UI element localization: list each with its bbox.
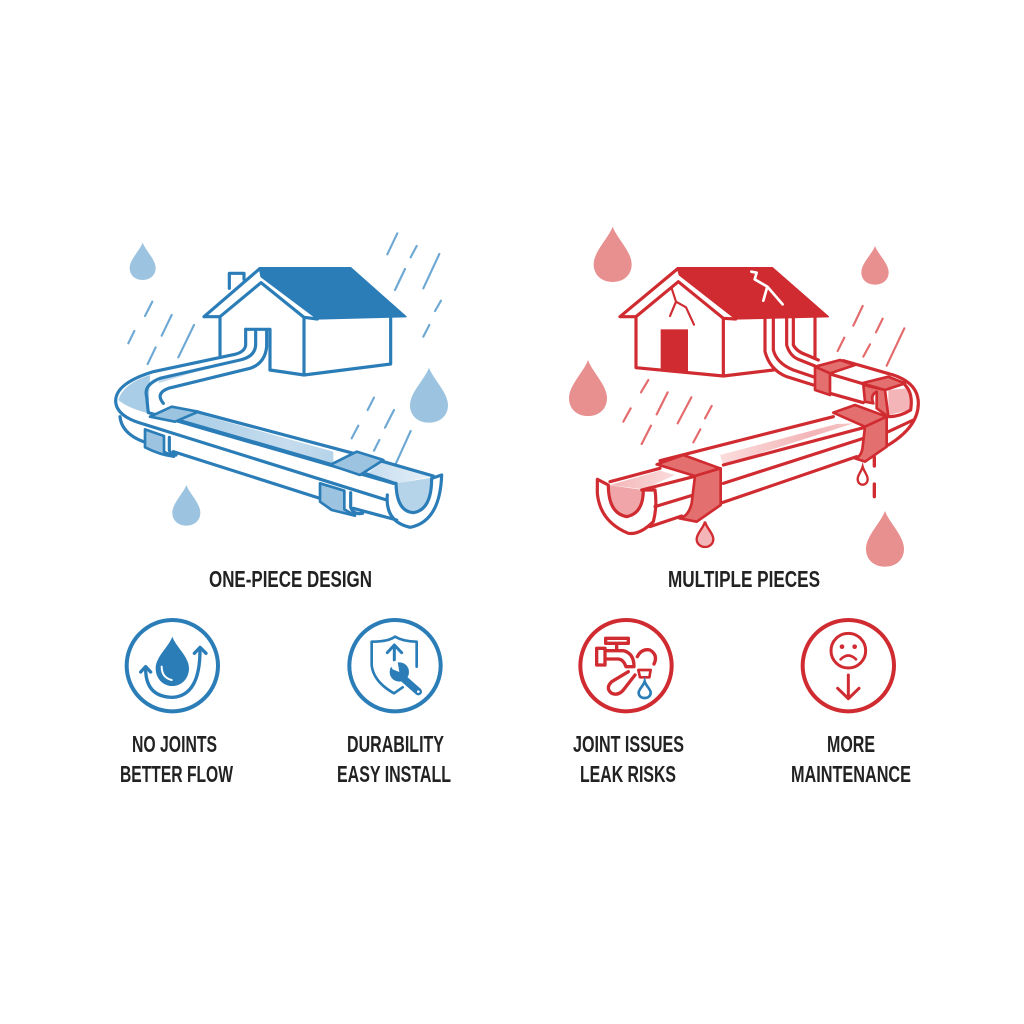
label: durability, easy install xyxy=(337,731,451,787)
house, red, with cracks xyxy=(620,268,828,376)
water drops, blue xyxy=(130,243,448,526)
icon: sad face with down arrow xyxy=(803,620,894,711)
pipe strap, left xyxy=(150,407,198,422)
label: joint issues, leak risks: JOINT ISSUES xyxy=(573,731,684,757)
strap, bend xyxy=(862,377,905,390)
label: more maintenance: MORE xyxy=(827,731,875,757)
multi-piece gutter, red xyxy=(597,318,918,547)
leak drips xyxy=(697,522,713,547)
icon: shield with wrench xyxy=(349,620,441,711)
panel: multiple pieces illustration xyxy=(569,227,918,567)
label: no joints, better flow: NO JOINTS xyxy=(132,731,217,757)
pipe strap, right xyxy=(330,452,383,475)
door xyxy=(661,329,688,371)
icon: water drop with flow arrows xyxy=(127,620,218,711)
roof crack xyxy=(751,272,783,304)
wall crack xyxy=(670,288,694,325)
label: durability, easy install: EASY INSTALL xyxy=(337,761,451,787)
label: more maintenance xyxy=(791,731,911,787)
label: durability, easy install: DURABILITY xyxy=(347,731,444,757)
rain streaks, red xyxy=(623,306,904,444)
strap, lower right xyxy=(833,405,887,427)
water drops, red xyxy=(569,227,904,567)
strap, lower left xyxy=(657,455,720,476)
label: more maintenance: MAINTENANCE xyxy=(791,761,911,787)
label: no joints, better flow: BETTER FLOW xyxy=(120,761,233,787)
house, blue xyxy=(204,268,406,375)
label: no joints, better flow xyxy=(120,731,233,787)
heading: one-piece design: ONE-PIECE DESIGN xyxy=(209,566,372,592)
icon: leaking tap and broken chain xyxy=(580,620,672,711)
one-piece gutter, blue xyxy=(116,329,442,527)
strap, upper xyxy=(815,360,855,373)
panel: one-piece design illustration xyxy=(116,233,448,527)
label: joint issues, leak risks xyxy=(573,731,684,787)
label: joint issues, leak risks: LEAK RISKS xyxy=(580,761,676,787)
heading: multiple pieces: MULTIPLE PIECES xyxy=(668,566,820,592)
rain streaks, blue xyxy=(128,233,441,463)
